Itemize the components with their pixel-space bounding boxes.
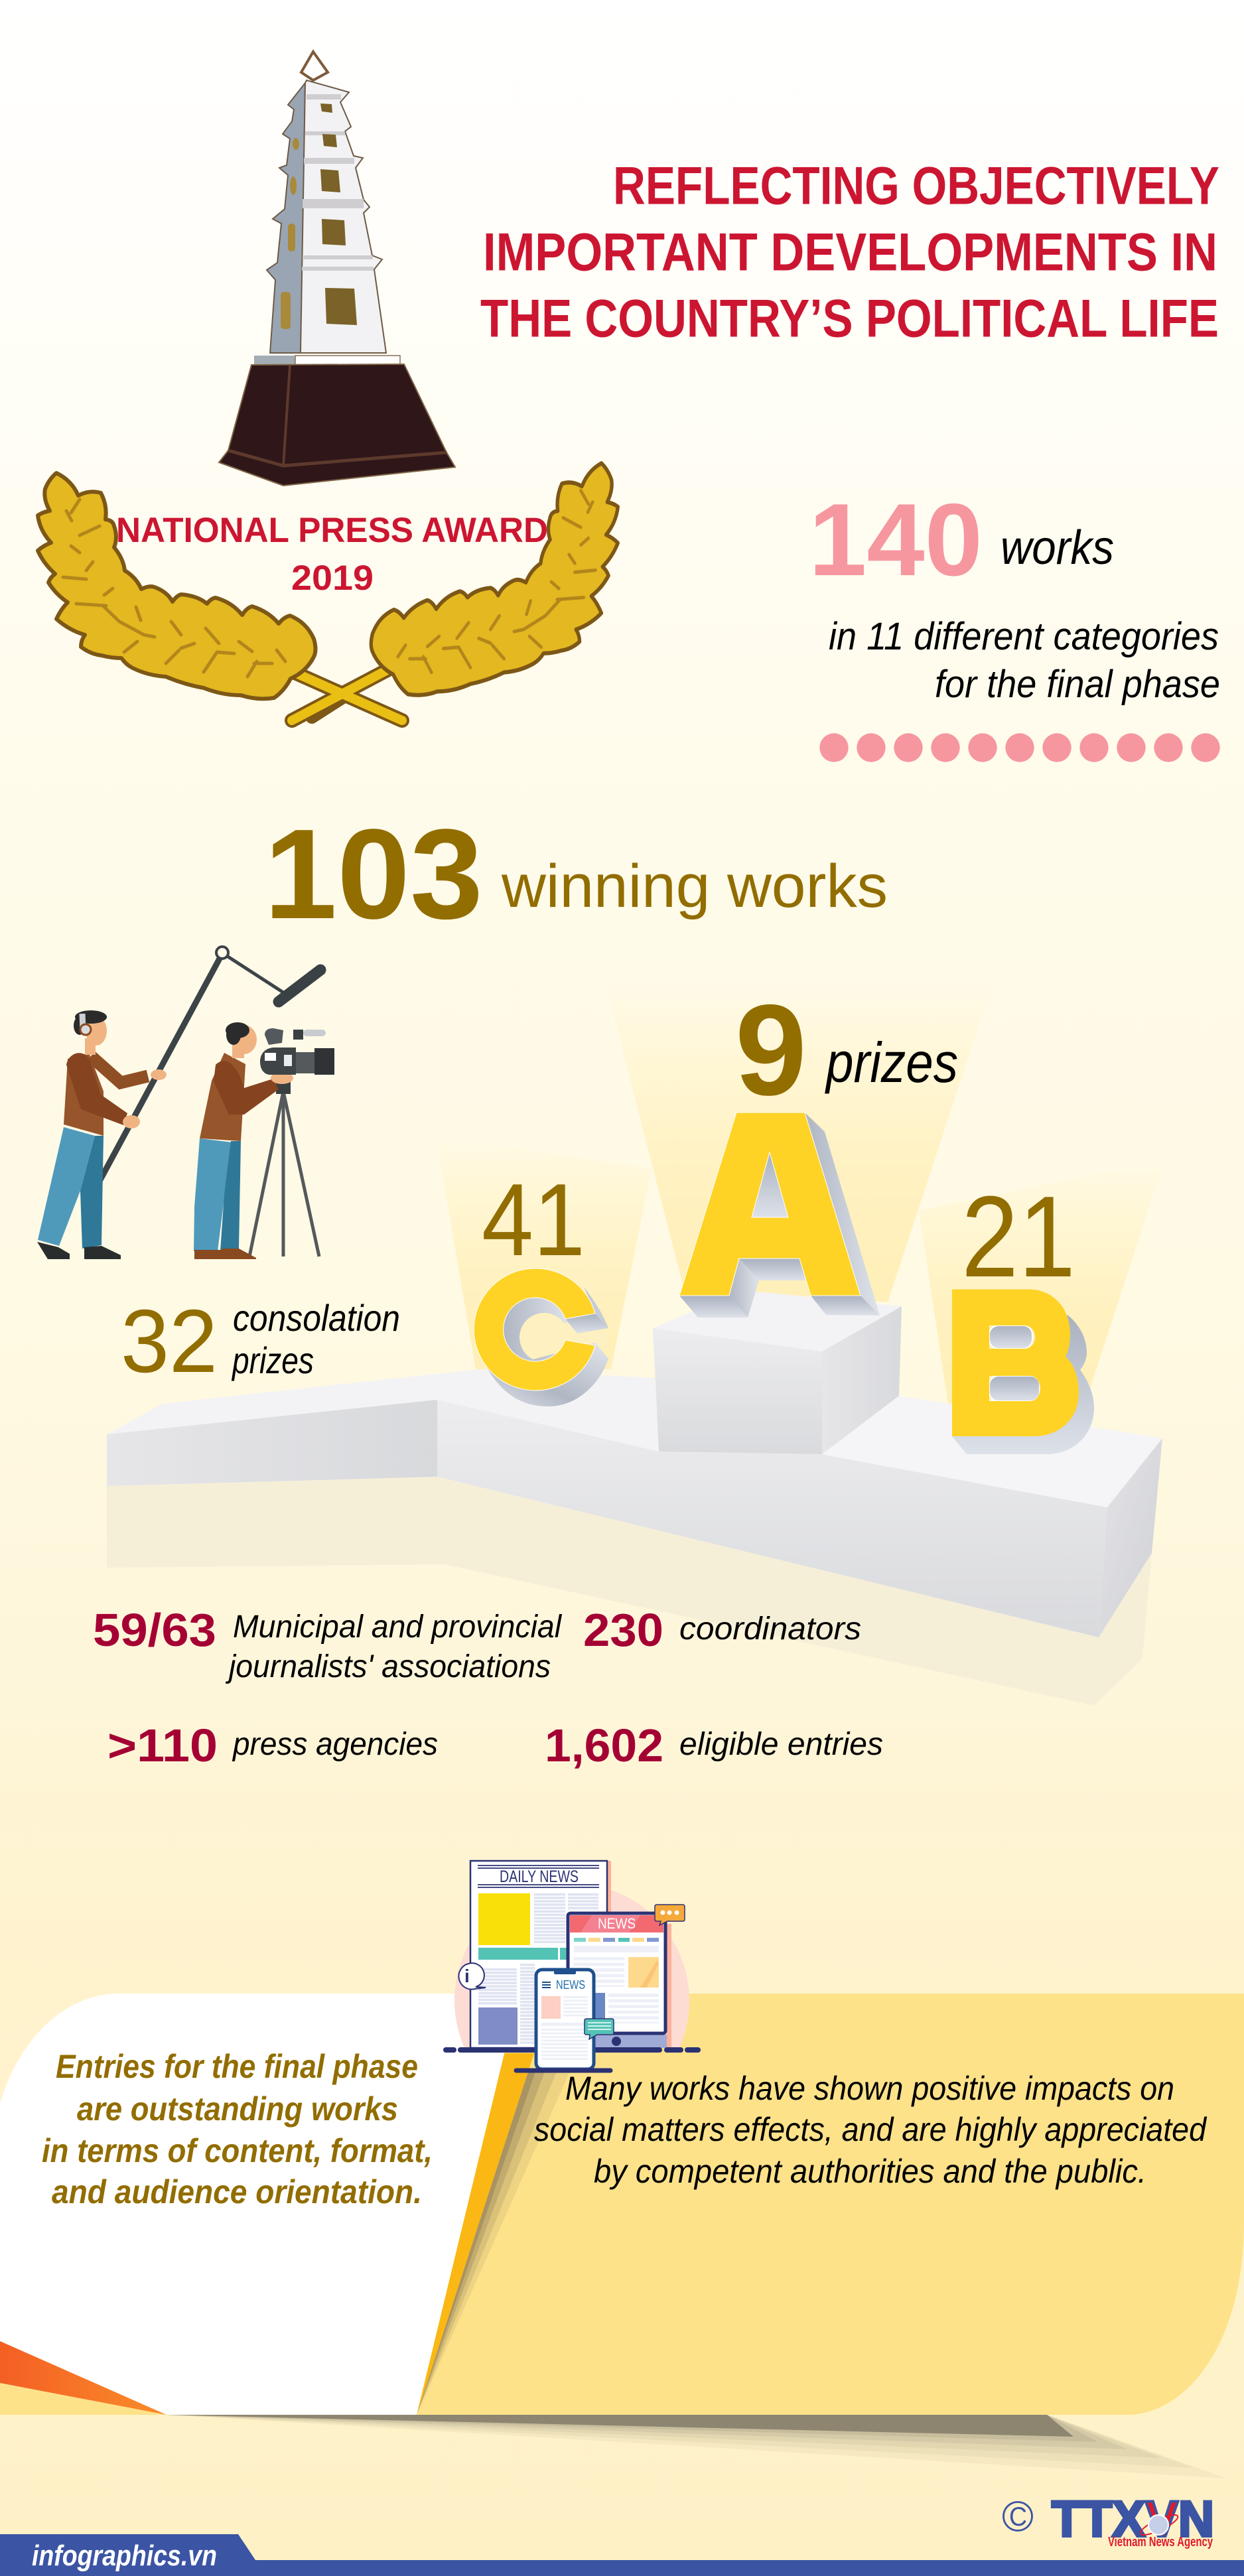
title (480, 157, 1219, 349)
icon: golden laurel wreath (38, 463, 618, 720)
text: impacts statement (534, 2070, 1208, 2190)
label: 9 prizes: prizes (824, 1032, 958, 1095)
panel: yellow statement (417, 1994, 1244, 2415)
text: entries statement: are outstanding works (77, 2090, 398, 2128)
footer site name: infographics.vn (32, 2540, 217, 2572)
podium reflection (107, 1477, 1152, 1706)
panel edge: amber strip with shadow (417, 2053, 571, 2415)
participation stats: coordinators (679, 1611, 861, 1647)
label: 9 prizes: 9 (735, 978, 807, 1122)
illustration: news media devices: DAILY NEWS (500, 1867, 579, 1886)
logo: TTXVN: TTXVN (1052, 2491, 1214, 2547)
prize letter C (474, 1268, 608, 1406)
stat: 140 works: works (1001, 521, 1114, 575)
podium light beams (436, 982, 1164, 1404)
participation stats: >110 (107, 1720, 218, 1771)
illustration: news media devices: NEWS (556, 1978, 585, 1992)
podium (107, 1290, 1162, 1637)
participation stats: journalists' associations (225, 1649, 551, 1684)
award name (116, 511, 548, 598)
participation stats: Municipal and provincial (233, 1609, 562, 1645)
stat: 32 consolation prizes: consolation (233, 1297, 400, 1339)
award name: NATIONAL PRESS AWARD (116, 511, 548, 550)
text: entries statement: and audience orientation. (52, 2173, 422, 2210)
participation stats: 59/63 (93, 1604, 216, 1656)
illustration: film crew (37, 947, 334, 1259)
label: 21: 21 (961, 1172, 1075, 1301)
footer bar (0, 2534, 1244, 2576)
stat: 32 consolation prizes: prizes (231, 1339, 314, 1381)
eleven category dots (819, 733, 1220, 762)
prize letter B (952, 1290, 1094, 1454)
icon: pagoda trophy (219, 52, 455, 486)
stat: 140 works: 140 (809, 482, 983, 597)
label: 9 prizes (735, 978, 958, 1122)
corner: orange triangle (0, 2341, 167, 2415)
participation stats (93, 1604, 883, 1771)
text: impacts statement: Many works have shown positive impacts on (565, 2070, 1174, 2107)
participation stats: eligible entries (679, 1727, 883, 1762)
text: entries statement: Entries for the final phase (56, 2048, 418, 2085)
illustration: news media devices: i (464, 1966, 470, 1986)
stat: 103 winning works (264, 802, 888, 945)
participation stats: 1,602 (545, 1720, 663, 1771)
stat: 32 consolation prizes (121, 1291, 400, 1391)
stat: 140 works: in 11 different categories (829, 615, 1219, 658)
text: impacts statement: by competent authorities and the public. (594, 2153, 1146, 2190)
stat: 103 winning works: winning works (501, 852, 888, 920)
stat: 140 works: for the final phase (935, 663, 1220, 706)
text: entries statement (42, 2048, 433, 2210)
award name: 2019 (291, 559, 374, 598)
text: impacts statement: social matters effects, and are highly appreciated (534, 2111, 1208, 2148)
prize letter A (679, 1113, 880, 1318)
stat: 140 works (809, 482, 1220, 706)
panel: white statement (0, 1994, 519, 2415)
participation stats: 230 (583, 1604, 663, 1656)
stat: 32 consolation prizes: 32 (121, 1291, 218, 1391)
logo: TTXVN: C (1009, 2502, 1027, 2532)
illustration: news media devices (446, 1861, 698, 2070)
illustration: news media devices: NEWS (598, 1915, 636, 1932)
bottom panel shadow (167, 2415, 1227, 2478)
text: entries statement: in terms of content, format, (42, 2132, 433, 2169)
participation stats: press agencies (232, 1727, 438, 1762)
stat: 103 winning works: 103 (264, 802, 483, 945)
label: 41: 41 (482, 1162, 585, 1277)
